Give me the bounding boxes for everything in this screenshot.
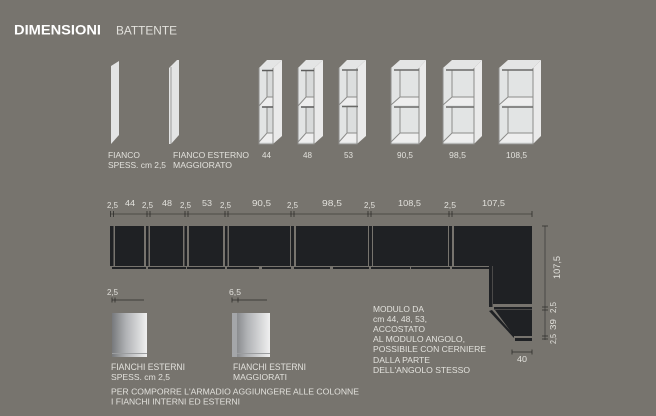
- text note: composition: I FIANCHI INTERNI ED ESTERNI: [111, 396, 240, 406]
- panel: side panel enlarged: MAGGIORATO: [173, 160, 232, 170]
- text note: corner module: cm 44, 48, 53,: [373, 314, 427, 324]
- text note: corner module: MODULO DA: [373, 304, 424, 314]
- cabinet 108,5: 108,5: [506, 150, 527, 160]
- swatch: external side 6,5: FIANCHI ESTERNI: [233, 362, 306, 372]
- text note: corner module: POSSIBILE CON CERNIERE: [373, 344, 486, 354]
- horizontal dimension line with labels: 48: [162, 198, 172, 208]
- text note: corner module: [373, 304, 486, 375]
- cabinet 44: [259, 60, 282, 160]
- panel: side panel standard: SPESS. cm 2,5: [108, 160, 166, 170]
- horizontal dimension line with labels: 44: [125, 198, 135, 208]
- panel: side panel standard: FIANCO: [108, 150, 140, 160]
- panel: side panel enlarged: [169, 60, 249, 170]
- corner width dimension: 40: [517, 354, 527, 364]
- title: DIMENSIONI: [14, 22, 101, 38]
- swatch: external side 6,5: MAGGIORATI: [233, 372, 287, 382]
- horizontal dimension line with labels: 90,5: [252, 198, 271, 208]
- horizontal dimension line with labels: 108,5: [398, 198, 421, 208]
- text note: corner module: AL MODULO ANGOLO,: [373, 334, 465, 344]
- plan view of wardrobe: [110, 226, 532, 341]
- vertical dimension line with labels: 2,5: [548, 302, 558, 313]
- horizontal dimension line with labels: 2,5: [107, 200, 118, 210]
- horizontal dimension line with labels: 2,5: [444, 200, 456, 210]
- cabinet 98,5: 98,5: [449, 150, 466, 160]
- cabinet 108,5: [499, 60, 541, 160]
- horizontal dimension line with labels: 2,5: [142, 200, 153, 210]
- swatch: external side 6,5: 6,5: [229, 287, 241, 297]
- cabinet 53: [339, 60, 366, 160]
- vertical dimension line with labels: 39: [548, 319, 558, 330]
- swatch: external side 2,5: [107, 287, 185, 382]
- swatch: external side 2,5: FIANCHI ESTERNI: [111, 362, 185, 372]
- corner width dimension: [512, 350, 532, 364]
- text note: composition: PER COMPORRE L'ARMADIO AGGIUNGERE ALLE COLONNE: [111, 386, 359, 396]
- cabinet 90,5: 90,5: [397, 150, 413, 160]
- horizontal dimension line with labels: 2,5: [364, 200, 375, 210]
- horizontal dimension line with labels: 98,5: [322, 198, 342, 208]
- horizontal dimension line with labels: [107, 198, 532, 217]
- swatch: external side 2,5: SPESS. cm 2,5: [111, 372, 170, 382]
- panel: side panel standard: [108, 61, 166, 170]
- cabinet 44: 44: [262, 150, 271, 160]
- vertical dimension line with labels: 107,5: [552, 256, 563, 279]
- cabinet 90,5: [391, 60, 426, 160]
- text note: corner module: DALLA PARTE: [373, 355, 430, 365]
- cabinet 53: 53: [344, 150, 353, 160]
- text note: corner module: ACCOSTATO: [373, 324, 425, 334]
- horizontal dimension line with labels: 2,5: [180, 200, 191, 210]
- cabinet 98,5: [443, 60, 482, 160]
- vertical dimension line with labels: 2,5: [548, 334, 558, 344]
- horizontal dimension line with labels: 53: [202, 198, 212, 208]
- title: BATTENTE: [116, 26, 177, 38]
- horizontal dimension line with labels: 2,5: [220, 200, 231, 210]
- title: [14, 22, 177, 38]
- horizontal dimension line with labels: 107,5: [482, 198, 505, 208]
- swatch: external side 6,5: [229, 287, 306, 382]
- vertical dimension line with labels: [542, 226, 563, 344]
- panel: side panel enlarged: FIANCO ESTERNO: [173, 150, 249, 160]
- text note: composition: [111, 386, 359, 406]
- horizontal dimension line with labels: 2,5: [287, 200, 298, 210]
- cabinet 48: 48: [303, 150, 312, 160]
- swatch: external side 2,5: 2,5: [107, 287, 118, 297]
- cabinet 48: [298, 60, 323, 160]
- text note: corner module: DELL'ANGOLO STESSO: [373, 365, 470, 375]
